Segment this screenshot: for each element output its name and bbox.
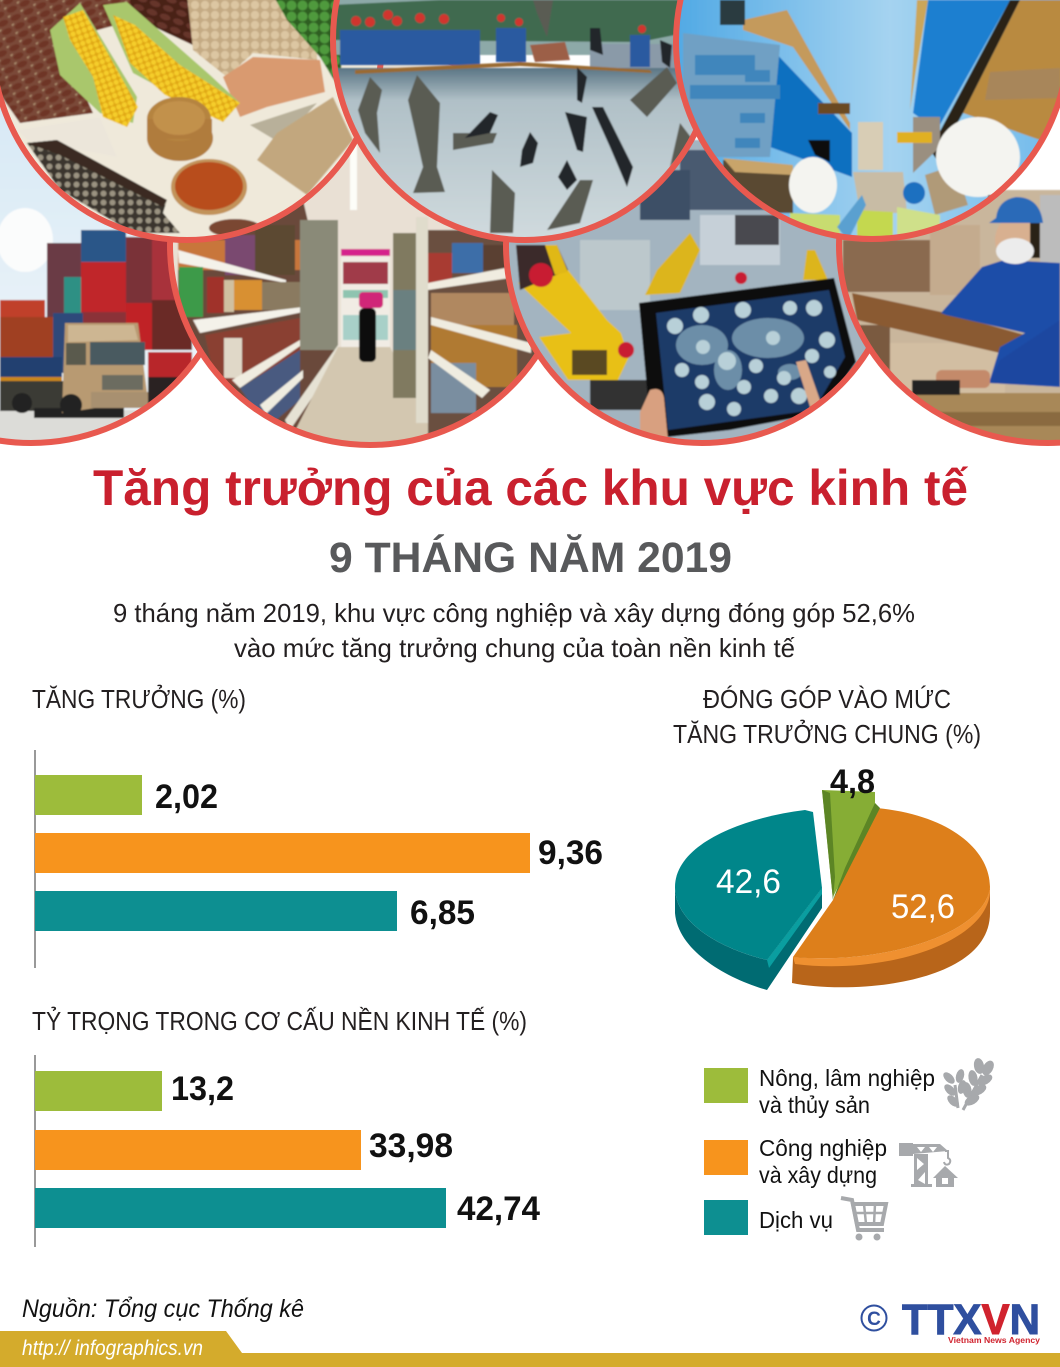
intro text: vào mức tăng trưởng chung của toàn nền kinh tế	[234, 633, 796, 663]
pie chart: contribution	[675, 763, 990, 990]
intro text: 9 tháng năm 2019, khu vực công nghiệp và xây dựng đóng góp 52,6%	[113, 598, 915, 628]
photo: construction site	[670, 0, 1060, 245]
pie chart: contribution: 4,8	[830, 763, 875, 801]
bar chart: structure: 13,2	[171, 1070, 234, 1108]
icon: wheat	[941, 1057, 996, 1110]
pie chart: contribution: 42,6	[716, 863, 781, 901]
intro text	[113, 598, 915, 663]
photo: truck and containers	[0, 107, 201, 446]
legend: agriculture: và thủy sản	[759, 1092, 870, 1118]
legend	[704, 1057, 996, 1240]
legend: industry	[704, 1135, 887, 1188]
photo: fish farm	[330, 0, 696, 243]
photo: corn and grains	[0, 0, 390, 245]
legend: agriculture	[704, 1065, 935, 1118]
photo: supermarket aisle	[167, 64, 538, 448]
legend: industry: và xây dựng	[759, 1162, 877, 1188]
footer band	[0, 1331, 1060, 1367]
legend: industry: Công nghiệp	[759, 1135, 887, 1161]
logo: TTXVN: Vietnam News Agency	[948, 1336, 1041, 1345]
legend: agriculture: Nông, lâm nghiệp	[759, 1065, 935, 1091]
legend: services: Dịch vụ	[759, 1207, 833, 1233]
photo: robot arm and tablet	[503, 139, 870, 446]
title: Tăng trưởng của các khu vực kinh tế	[93, 460, 968, 516]
photo: wood factory worker	[836, 189, 1060, 446]
bar chart: growth: 9,36	[538, 834, 603, 872]
source: Nguồn: Tổng cục Thống kê	[22, 1295, 304, 1323]
legend: services	[704, 1200, 833, 1235]
heading: growth: TĂNG TRƯỞNG (%)	[32, 683, 246, 714]
bar chart: growth	[35, 750, 603, 968]
heading: contribution	[673, 684, 981, 749]
bar chart: growth: 6,85	[410, 894, 475, 932]
icon: shopping cart	[841, 1198, 886, 1240]
pie chart: contribution: 52,6	[891, 888, 955, 926]
logo: TTXVN: C	[867, 1309, 881, 1330]
heading: contribution: ĐÓNG GÓP VÀO MỨC	[703, 684, 951, 714]
bar chart: structure: 33,98	[369, 1127, 453, 1165]
logo: TTXVN: TTXVN	[902, 1296, 1040, 1344]
footer band: http:// infographics.vn	[22, 1337, 203, 1360]
bar chart: growth: 2,02	[155, 778, 218, 816]
bar chart: structure: 42,74	[457, 1190, 540, 1228]
bar chart: structure	[35, 1055, 540, 1247]
icon: crane and house	[899, 1143, 958, 1187]
heading: contribution: TĂNG TRƯỞNG CHUNG (%)	[673, 718, 981, 749]
heading: structure: TỶ TRỌNG TRONG CƠ CẤU NỀN KINH TẾ (%)	[32, 1006, 527, 1036]
subtitle: 9 THÁNG NĂM 2019	[329, 534, 732, 582]
